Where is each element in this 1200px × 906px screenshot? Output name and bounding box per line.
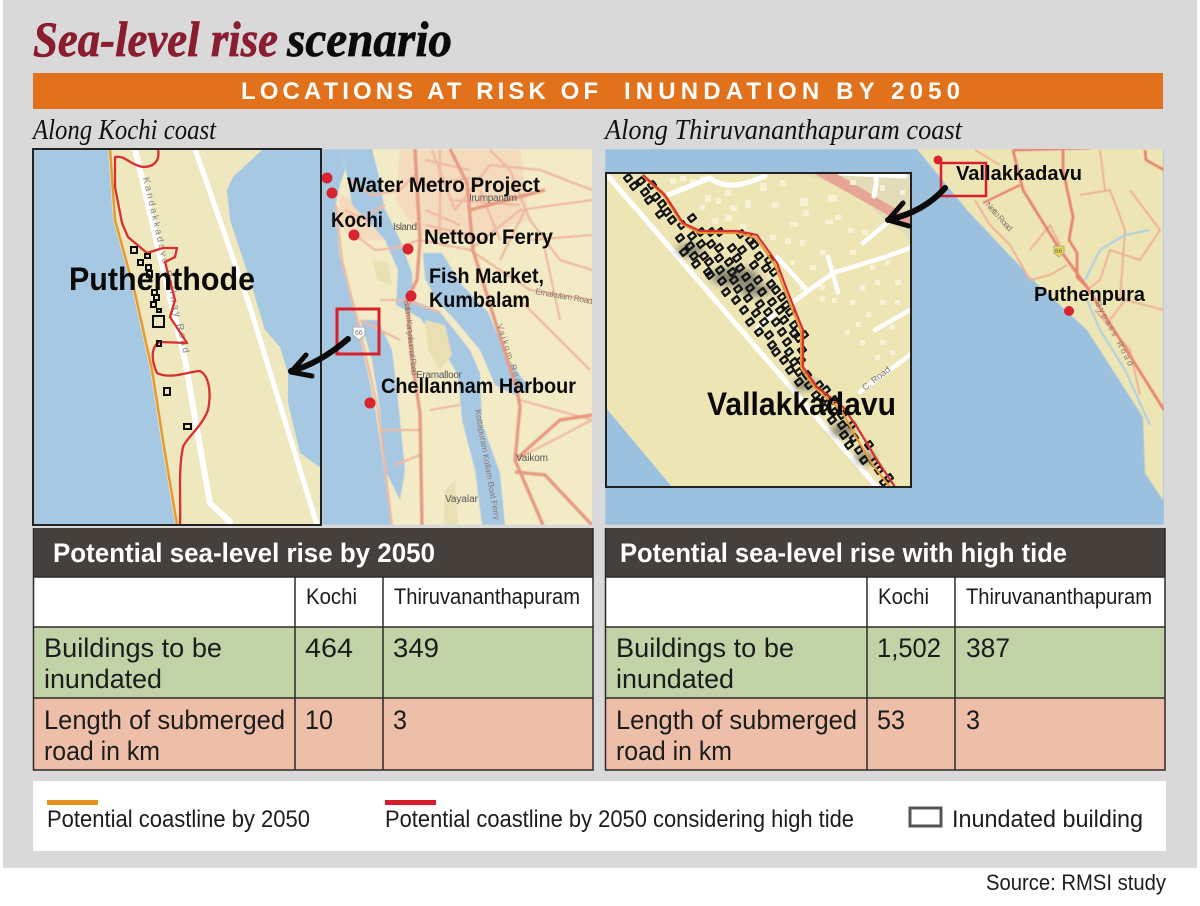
place labels: Kochi: Water Metro Project [347, 174, 540, 197]
map: Kochi region [322, 149, 594, 525]
map labels: Vayalar [445, 494, 479, 505]
heading: Kochi coast: Along Kochi coast [31, 115, 217, 146]
map labels: Vaikom Road [495, 323, 526, 391]
table: Potential sea-level rise by 2050 [33, 528, 593, 770]
inset map: Vallakkadavu [606, 173, 911, 487]
place labels: Kochi: Fish Market, [429, 265, 544, 288]
table: Potential sea-level rise by 2050: Kochi [306, 584, 357, 609]
table: Potential sea-level rise by 2050: 3 [393, 705, 407, 735]
subtitle banner: INUNDATION BY 2050 [624, 78, 960, 105]
legend [33, 781, 1166, 851]
map: Thiruvananthapuram region [605, 148, 1164, 525]
table: Potential sea-level rise by 2050: Potential sea-level rise by 2050 [53, 538, 435, 568]
table: Potential sea-level rise by 2050: Length of submerged [44, 705, 285, 735]
coastline with high tide [115, 149, 210, 525]
table: Potential sea-level rise by 2050: 349 [393, 633, 439, 663]
place labels: Thiruvananthapuram: Vallakkadavu [956, 163, 1082, 185]
table: Potential sea-level rise by 2050: 464 [305, 633, 353, 663]
inset map: Vallakkadavu: C. Road [860, 364, 892, 393]
location dots: Thiruvananthapuram [934, 156, 1074, 316]
map labels [393, 193, 594, 521]
subtitle banner: LOCATIONS AT RISK OF [241, 78, 598, 105]
location box [337, 309, 379, 354]
map labels: Kottapuram Kollam Boat Ferry [473, 409, 502, 521]
highway shield [353, 327, 365, 340]
place labels: Kochi: Chellannam Harbour [381, 375, 576, 398]
subtitle banner [33, 73, 1163, 109]
map labels: Eramalloor [416, 370, 463, 381]
coastline 2050 [110, 149, 177, 525]
map labels: Vaikom [516, 453, 548, 464]
table: Potential sea-level rise with high tide: Length of submerged [616, 705, 857, 735]
place labels: Kochi [331, 174, 576, 398]
title: Sea-level rise [33, 11, 278, 67]
coastline with high tide [643, 175, 895, 487]
inset frame [33, 149, 321, 525]
road label: Kandakkadavu Railway Road [140, 176, 191, 354]
heading: Thiruvananthapuram coast: Along Thiruvananthapuram coast [603, 115, 963, 146]
table: Potential sea-level rise with high tide: 3 [966, 705, 980, 735]
table: Potential sea-level rise by 2050: 10 [305, 705, 333, 735]
source: Source: RMSI study [986, 870, 1166, 895]
arrow: Kochi [291, 339, 348, 376]
legend: inundated building: Inundated building [952, 806, 1143, 833]
place labels: Kochi: Kumbalam [429, 289, 530, 312]
location box [941, 163, 986, 196]
table: Potential sea-level rise with high tide: 53 [877, 705, 905, 735]
inset frame [606, 173, 911, 487]
table: Potential sea-level rise by 2050: road in km [44, 736, 160, 766]
inset label: Puthenthode: Puthenthode [69, 261, 255, 297]
map labels: Salem Kanyakumari Road [402, 299, 420, 376]
map labels: Irumpanam [469, 193, 517, 204]
legend: potential coastline: Potential coastline by 2050 [47, 806, 310, 833]
table: Potential sea-level rise by 2050: inundated [44, 664, 162, 694]
title [33, 11, 452, 67]
map labels: Ernakulam Road [535, 286, 594, 306]
table: Potential sea-level rise with high tide: Kochi [878, 584, 929, 609]
table: Potential sea-level rise by 2050: Thiruvananthapuram [394, 584, 580, 609]
highway shield: 66 [1055, 248, 1063, 255]
location dots: Kochi [322, 173, 416, 408]
building footprints (background) [670, 176, 905, 360]
coastline 2050 [642, 175, 890, 487]
title: scenario [286, 11, 452, 67]
table: Potential sea-level rise with high tide: Buildings to be [616, 633, 794, 663]
table: Potential sea-level rise with high tide: inundated [616, 664, 734, 694]
table: Potential sea-level rise with high tide: Thiruvananthapuram [966, 584, 1152, 609]
place labels: Thiruvananthapuram: Puthenpura [1034, 284, 1146, 306]
road labels: Bypass Road [1093, 299, 1136, 368]
inset label: Vallakkadavu: Vallakkadavu [707, 386, 896, 422]
place labels: Kochi: Kochi [331, 209, 383, 232]
building blur [677, 244, 875, 464]
table: Potential sea-level rise by 2050: Buildings to be [44, 633, 222, 663]
table: Potential sea-level rise with high tide: 387 [966, 633, 1010, 663]
table: Potential sea-level rise with high tide: road in km [616, 736, 732, 766]
arrow: Thiruvananthapuram [888, 188, 945, 226]
buildings [131, 247, 191, 429]
table: Potential sea-level rise with high tide: Potential sea-level rise with high tide [620, 538, 1067, 568]
highway shield: 66 [355, 330, 363, 337]
road labels [984, 200, 1136, 368]
place labels: Thiruvananthapuram [956, 163, 1146, 306]
road labels: Netto Road [984, 200, 1015, 233]
map labels: Island [393, 222, 417, 233]
inundated buildings [624, 174, 893, 486]
place labels: Kochi: Nettoor Ferry [424, 226, 553, 249]
highway shield [1054, 246, 1064, 257]
table: Potential sea-level rise with high tide [605, 528, 1165, 770]
table: Potential sea-level rise with high tide: 1,502 [877, 633, 941, 663]
legend: coastline with high tide: Potential coastline by 2050 considering high tide [385, 806, 854, 833]
inset map: Puthenthode [33, 149, 321, 525]
